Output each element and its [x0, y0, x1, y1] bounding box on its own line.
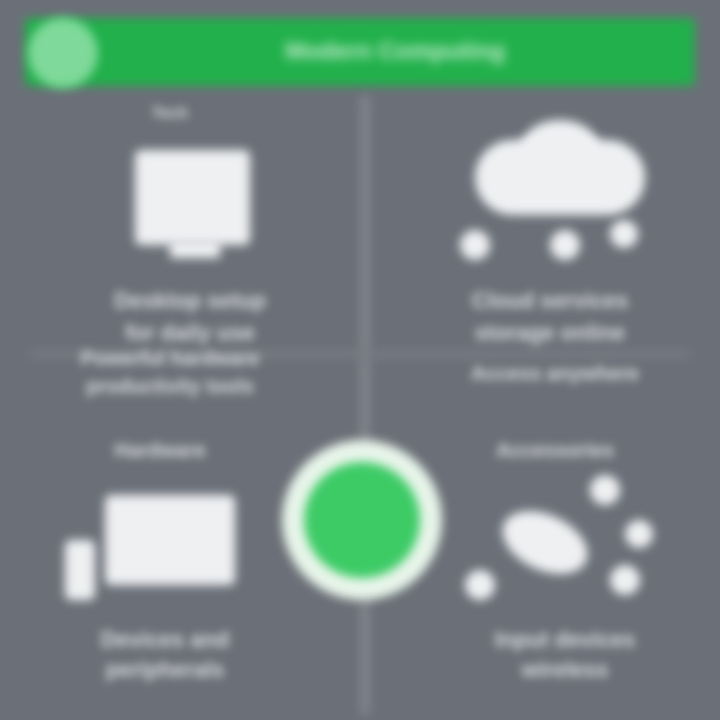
text block: Cloud services: [472, 288, 628, 313]
text block: wireless: [522, 657, 608, 682]
icon: network dot: [550, 230, 580, 260]
text block: for daily use: [125, 320, 255, 345]
icon: monitor: [105, 495, 235, 585]
icon: mouse: [493, 499, 597, 586]
icon: dot: [590, 475, 620, 505]
header title: Modern Computing: [285, 38, 505, 65]
panel: top-left: [76, 102, 270, 400]
text block: Devices and: [101, 627, 229, 652]
icon: speaker: [65, 540, 95, 600]
text block small: [76, 346, 262, 400]
icon: dot: [465, 570, 495, 600]
text block: [468, 288, 632, 348]
header bar: [25, 18, 695, 86]
icon: monitor stand: [170, 240, 220, 258]
text block small: Powerful hardware: [81, 348, 259, 370]
center badge inner: [304, 462, 420, 578]
text block small: productivity tools: [86, 376, 254, 398]
icon: monitor: [135, 150, 250, 245]
icon: cloud top: [520, 120, 600, 180]
text block small: Access anywhere: [471, 363, 639, 385]
icon: network dot: [610, 220, 638, 248]
text block: Desktop setup: [114, 288, 266, 313]
text block: peripherals: [106, 657, 224, 682]
center badge: [282, 440, 442, 600]
horizontal divider: [30, 350, 690, 358]
text block: storage online: [475, 320, 625, 345]
panel: bottom-left: [58, 439, 242, 684]
icon: cloud: [475, 140, 645, 215]
text block: [110, 288, 270, 348]
icon: dot: [625, 520, 653, 548]
vertical divider: [360, 95, 370, 715]
panel: top-right: [454, 113, 652, 387]
text block: [96, 626, 234, 684]
small label: Tech: [152, 105, 188, 122]
panel: bottom-right: [458, 439, 660, 682]
label: Accessories: [496, 440, 614, 462]
text block: [490, 627, 638, 682]
icon: network dots: [460, 230, 490, 260]
label: Hardware: [114, 440, 206, 462]
text block: Input devices: [495, 627, 635, 652]
header badge: [28, 18, 98, 88]
icon: dot: [610, 565, 640, 595]
